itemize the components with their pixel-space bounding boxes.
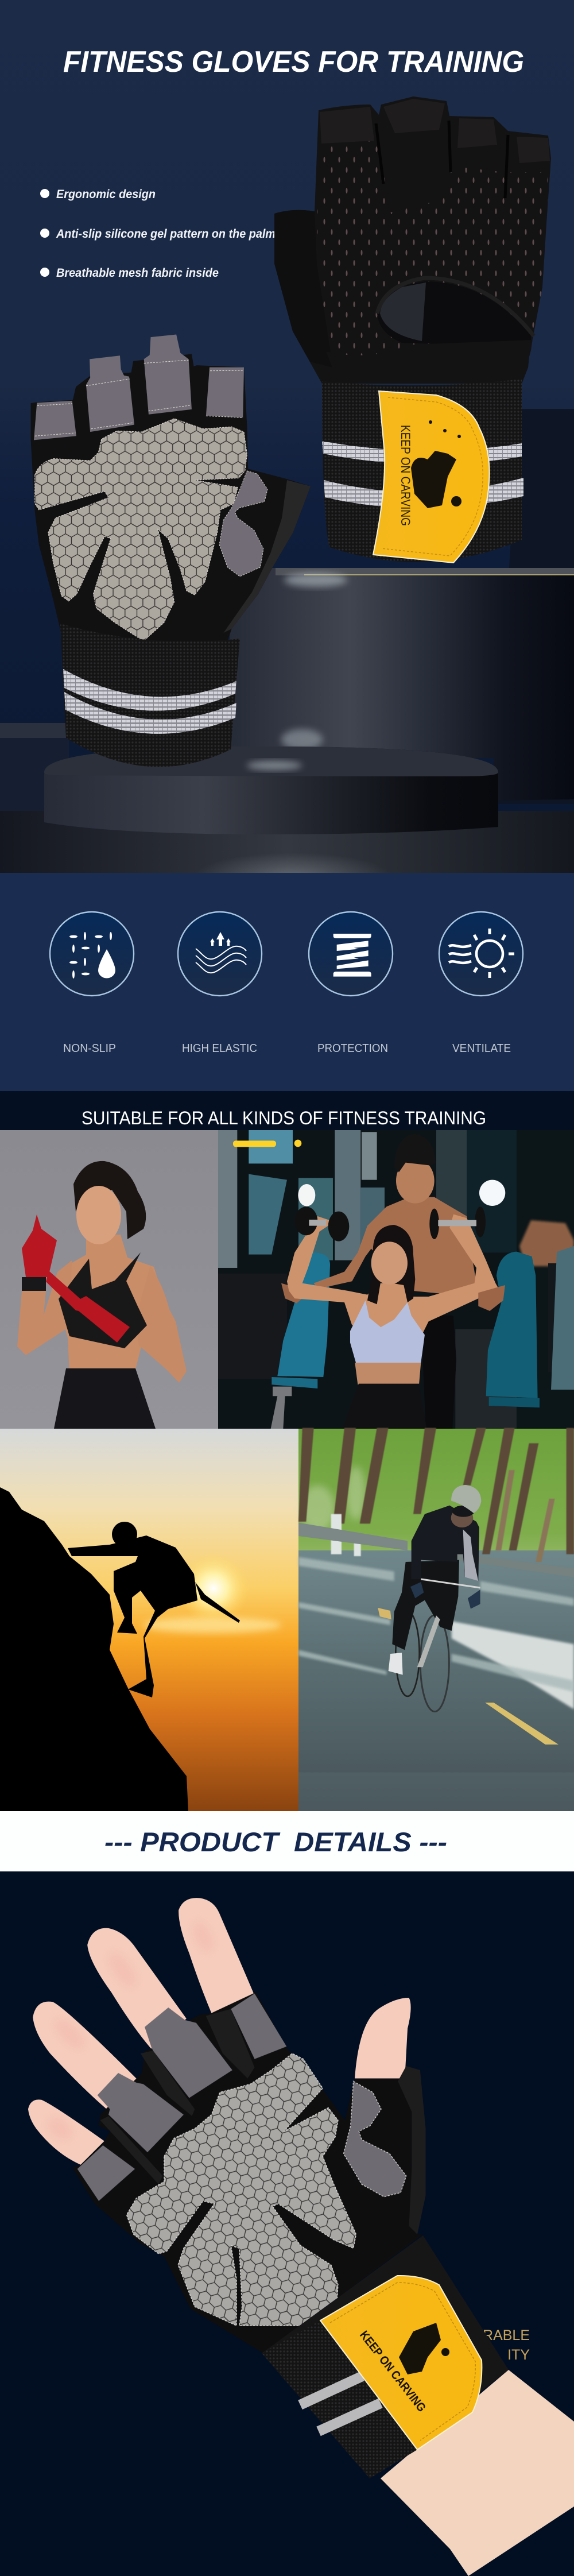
bench seat: [272, 1377, 317, 1388]
dappled road streaks: [298, 1557, 574, 1692]
lights: [298, 1180, 505, 1206]
upper pedestal: [230, 568, 574, 800]
palm opening: [377, 278, 534, 344]
trainer torso and arms: [314, 1197, 476, 1295]
trainee arms and shoulders: [287, 1214, 503, 1337]
rear wheel: [395, 1611, 420, 1696]
thumb pad: [219, 471, 267, 577]
strap knit section: [262, 2320, 417, 2478]
gym background, right extension: [517, 1130, 574, 1429]
icon: ventilate sun: [439, 912, 523, 996]
trainer pants: [423, 1314, 456, 1429]
photo: climber at sunset: [0, 1429, 298, 1811]
thumb panel: [274, 210, 333, 368]
woman: left arm: [17, 1260, 72, 1355]
back shelf: dark block at right: [494, 409, 574, 804]
tab seam: [330, 2283, 475, 2440]
partly hidden caption: RABLE: [483, 2327, 530, 2343]
rock face: [0, 1487, 188, 1811]
shoe: [389, 1653, 403, 1675]
dumbbell left: [294, 1206, 349, 1241]
guardrail left: [298, 1523, 408, 1550]
trainee midriff: [355, 1363, 421, 1384]
face: [451, 1509, 473, 1527]
hook strap: [326, 340, 531, 384]
partly hidden caption: [483, 2327, 530, 2363]
sunlit road patches: [452, 1621, 574, 1709]
back ledge at left: [0, 723, 69, 811]
icon: protection spring: [309, 912, 393, 996]
woman: neck and torso: [57, 1235, 164, 1374]
knuckle mesh: [100, 2009, 426, 2234]
label wordmark: KEEP ON CARVING: [398, 425, 413, 526]
label: ventilate: VENTILATE: [452, 1042, 511, 1055]
trainer hand right: [478, 1285, 505, 1311]
finger flush: [44, 1919, 217, 2144]
floor glow: [195, 853, 390, 899]
trainee leggings: [343, 1384, 426, 1429]
tab logo: [399, 2323, 449, 2374]
handlebar: [421, 1579, 480, 1588]
yellow label: [373, 391, 490, 563]
wrist wrap: palm-side glove: [60, 624, 240, 767]
icon: high elastic: [178, 912, 262, 996]
fingertip pads: [320, 99, 550, 163]
road dash near: [485, 1703, 559, 1745]
wrap stripes: [322, 441, 523, 508]
detail panel: gloved hand: [0, 1871, 574, 2576]
guardrail right: [457, 1553, 574, 1577]
jersey: [412, 1506, 479, 1581]
heading band: product details: [0, 1811, 574, 1871]
thumb edge band: [223, 480, 311, 633]
woman: face: [76, 1186, 121, 1244]
trainee face: [371, 1241, 408, 1285]
right bench seat: [489, 1397, 540, 1407]
label seam: [381, 397, 483, 556]
heading band: product details: --- PRODUCT DETAILS ---: [104, 1827, 447, 1857]
woman: wrist band: [22, 1277, 46, 1291]
woman: red hand wrap: [22, 1214, 57, 1277]
gloves: [410, 1582, 480, 1609]
hand and glove: [28, 1898, 426, 2353]
hero panel: fitness gloves: [0, 0, 574, 899]
trainee hair: [367, 1225, 415, 1304]
whitewashed trunks: [331, 1514, 361, 1556]
arm: [381, 2370, 574, 2576]
floor: [0, 811, 574, 873]
left bench: [277, 1252, 330, 1377]
label: non-slip: NON-SLIP: [63, 1042, 116, 1055]
label: high elastic: HIGH ELASTIC: [182, 1042, 257, 1055]
photo: woman wrapping hands: [0, 1130, 218, 1429]
dumbbell right: [429, 1206, 486, 1239]
trainer head: [394, 1134, 435, 1204]
legs: [392, 1560, 459, 1650]
title: FITNESS GLOVES FOR TRAINING: [63, 45, 524, 79]
feature bullet: ergonomic design: Ergonomic design: [56, 188, 156, 201]
photo: road cyclist: [298, 1428, 574, 1811]
feature bullet: breathable mesh: Breathable mesh fabric inside: [56, 266, 219, 280]
photo: gym training: [218, 1130, 574, 1429]
section heading: suitable for all kinds: [0, 1091, 574, 1130]
woman: sports bra: [59, 1252, 147, 1348]
wrist strap: [262, 2235, 509, 2478]
glasses: [452, 1506, 475, 1517]
sun: [178, 1553, 249, 1624]
sleeve panel: [463, 1529, 478, 1581]
road surface: [298, 1556, 574, 1773]
palm-side glove: [31, 334, 311, 647]
finger slits: [376, 121, 508, 198]
thumb pad: [344, 2081, 406, 2197]
bench legs: [271, 1387, 292, 1429]
fingers: [28, 1898, 411, 2165]
label logo: [411, 420, 461, 508]
horizon glow: [144, 1617, 281, 1633]
feature icons panel: [0, 873, 574, 1091]
tree trunks: [298, 1428, 574, 1562]
frame: [417, 1615, 440, 1667]
woman: red bandage: [46, 1271, 130, 1343]
trainer hand left: [281, 1283, 302, 1304]
wrist wrap: back-of-hand glove: [322, 379, 523, 563]
woman: shorts: [54, 1368, 156, 1429]
glove body: [72, 1992, 426, 2353]
finger tabs: [77, 1994, 286, 2201]
back-of-hand glove: [274, 96, 551, 384]
bright forest gaps: [300, 1466, 366, 1531]
gym floor: [455, 1329, 517, 1429]
partly hidden caption: ITY: [507, 2347, 530, 2363]
helmet: [451, 1485, 481, 1513]
climber silhouette: [68, 1522, 240, 1697]
front wheel: [420, 1615, 449, 1712]
woman: right arm: [135, 1266, 187, 1383]
feature bullet: anti-slip: Anti-slip silicone gel pattern on the palm: [56, 227, 276, 241]
yellow tab: [320, 2276, 482, 2450]
strap stripes: [300, 2376, 381, 2431]
section heading: suitable for all kinds: SUITABLE FOR ALL KINDS OF FITNESS TRAINING: [82, 1108, 486, 1128]
gym windows and pillars: [218, 1130, 517, 1268]
dumbbell rack: [218, 1274, 287, 1379]
palm pad: [127, 2053, 356, 2326]
trainee top: [350, 1301, 425, 1363]
yellow marker bar: [233, 1140, 301, 1147]
finger tabs: [34, 334, 244, 440]
label: protection: PROTECTION: [317, 1042, 388, 1055]
palm pad: [35, 419, 247, 641]
icon: non-slip: [50, 912, 134, 996]
woman: hair: [73, 1161, 146, 1239]
center line dash: [378, 1608, 391, 1619]
right bench: [486, 1252, 538, 1398]
tab wordmark: KEEP ON CARVING: [357, 2329, 428, 2415]
cyclist: [389, 1485, 481, 1712]
finger stitching: [35, 360, 243, 436]
lower pedestal: [44, 747, 498, 834]
